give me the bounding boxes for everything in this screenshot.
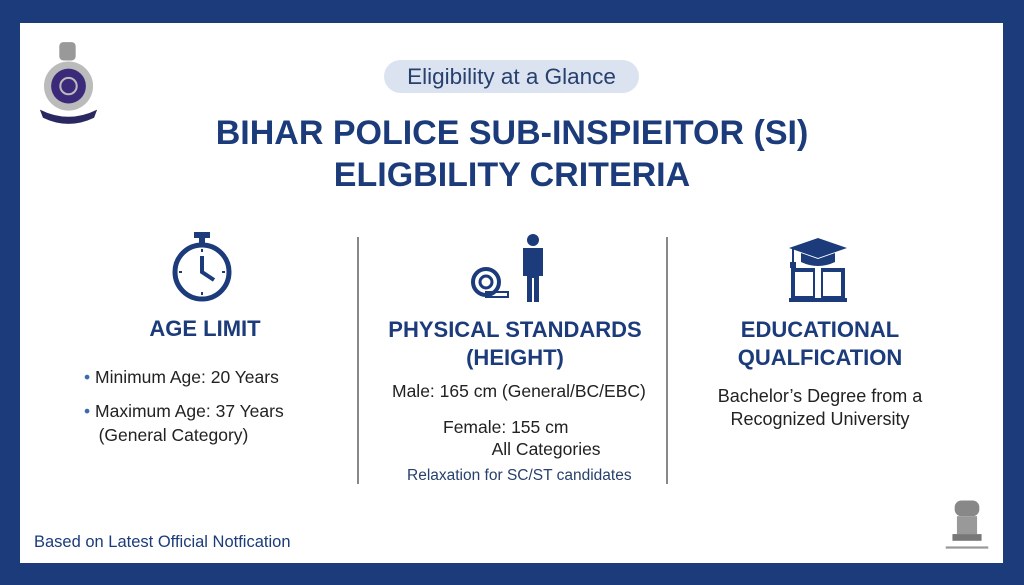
title (216, 114, 808, 194)
text: degree: Bachelor’s Degree from a (718, 386, 922, 406)
text: degree: Recognized University (730, 409, 910, 429)
badge: eligibility at a glance (384, 60, 639, 93)
icon: measuring tape and person (471, 234, 543, 302)
note: relaxation: Relaxation for SC/ST candidates (407, 467, 632, 484)
icon: national emblem (946, 500, 988, 549)
badge: eligibility at a glance: Eligibility at a Glance (407, 64, 616, 89)
icon: police emblem (40, 42, 98, 124)
panel: age limit (84, 232, 284, 445)
panel: education (718, 238, 922, 429)
title: BIHAR POLICE SUB-INSPIEITOR (SI) (216, 114, 808, 152)
panel: physical standards (388, 234, 646, 484)
panel: physical standards: Female: 155 cm (443, 417, 568, 437)
icon: graduation cap and book (789, 238, 847, 302)
heading: physical standards (388, 317, 642, 370)
heading: educational qualification (738, 317, 902, 370)
icon: stopwatch (172, 232, 232, 302)
text: height list: Male: 165 cm (General/BC/EBC) (392, 381, 646, 401)
heading: educational qualification: EDUCATIONAL (741, 317, 899, 342)
footer note: Based on Latest Official Notfication (34, 533, 291, 551)
heading: age limit: AGE LIMIT (149, 316, 261, 341)
text: age list: (General Category) (99, 425, 248, 445)
heading: physical standards: PHYSICAL STANDARDS (388, 317, 642, 342)
text: age list: • Minimum Age: 20 Years (84, 367, 279, 387)
text: age list (84, 367, 284, 445)
heading: physical standards: (HEIGHT) (466, 345, 564, 370)
title: ELIGBILITY CRITERIA (334, 156, 690, 194)
text: degree (718, 386, 922, 429)
heading: educational qualification: QUALFICATION (738, 345, 902, 370)
text: age list: • Maximum Age: 37 Years (84, 401, 284, 421)
panel: physical standards: All Categories (492, 439, 601, 459)
